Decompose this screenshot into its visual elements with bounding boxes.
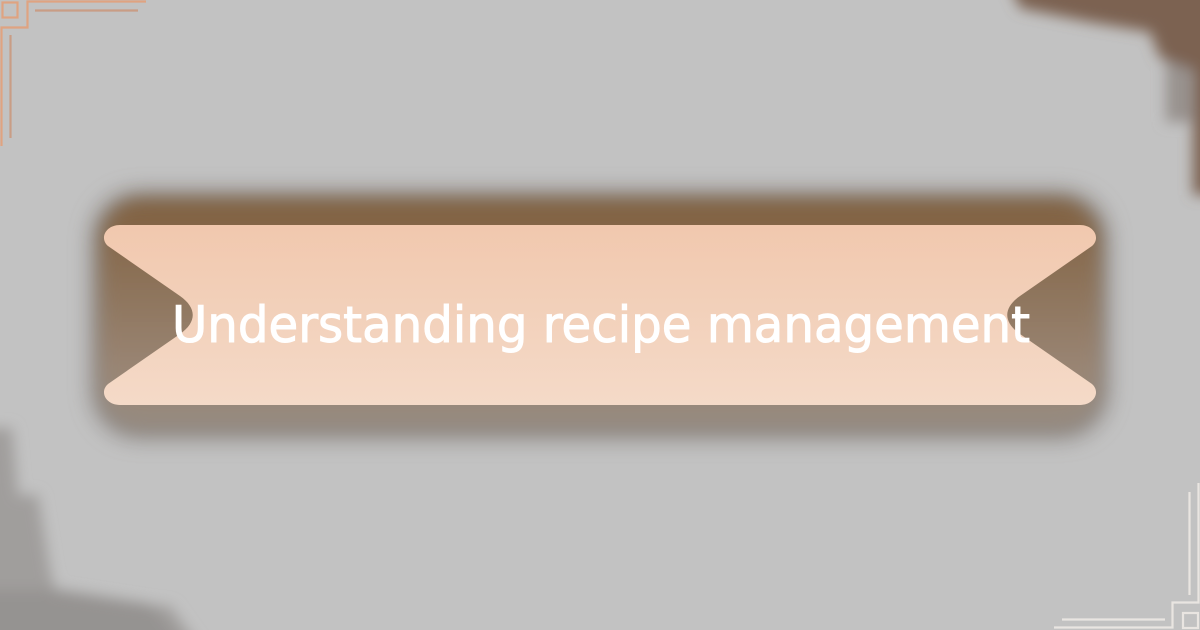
title: Understanding recipe management bbox=[172, 296, 1030, 354]
corner frame: bottom right bbox=[1054, 483, 1198, 628]
corner frame: top left bbox=[2, 2, 146, 146]
blurred corner shadow: top right bbox=[1006, 0, 1200, 195]
ribbon drop shadow bbox=[92, 192, 1108, 438]
blurred corner shadow: bottom left bbox=[0, 428, 205, 630]
ribbon banner bbox=[104, 225, 1096, 405]
